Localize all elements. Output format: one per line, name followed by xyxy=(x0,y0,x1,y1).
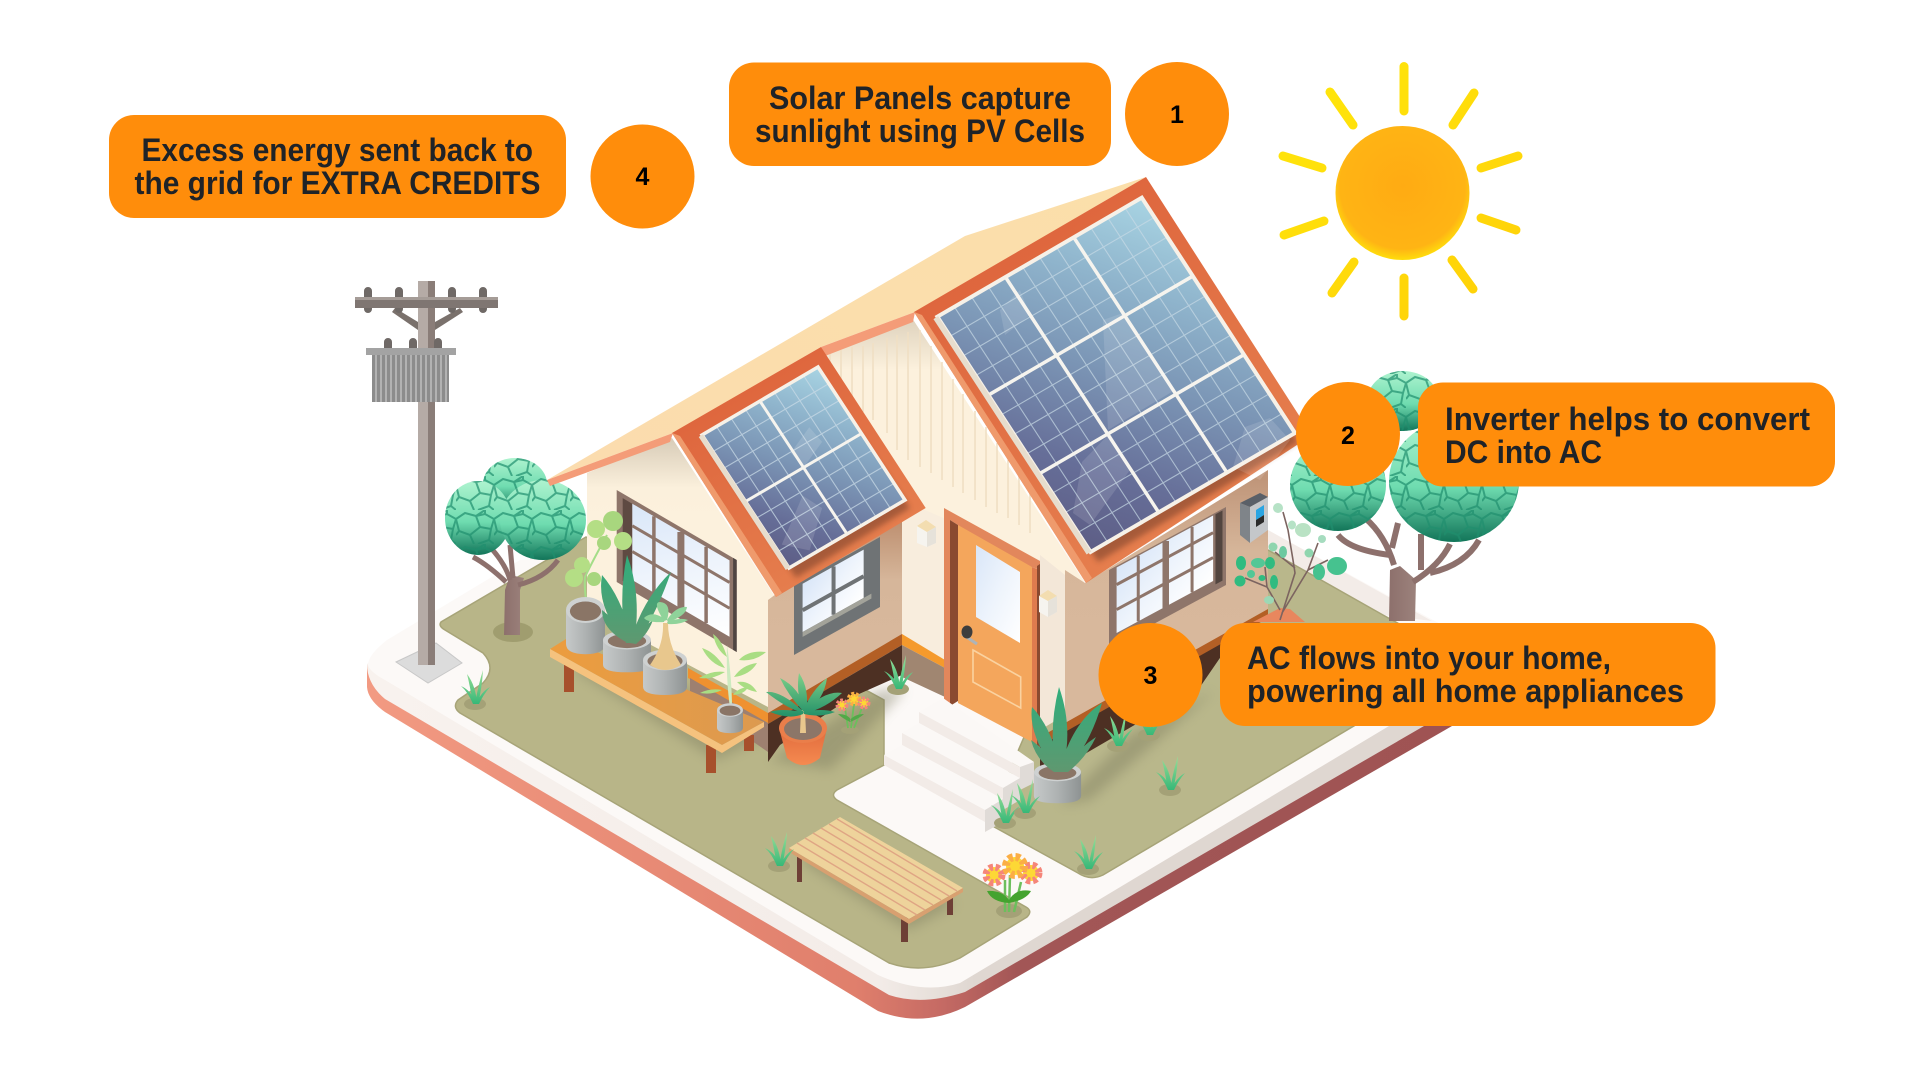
pot xyxy=(1034,763,1081,803)
riser two xyxy=(902,733,1003,799)
top landing xyxy=(919,698,1034,767)
riser three xyxy=(884,755,985,822)
door handle xyxy=(962,634,977,644)
door wall cream xyxy=(1040,555,1065,730)
right tan wall xyxy=(1065,470,1268,725)
centre wall xyxy=(902,500,1040,727)
callout 4: Excess energy sent back to xyxy=(142,132,533,168)
step number 4: 4 xyxy=(636,163,650,191)
pot four xyxy=(717,703,743,733)
callout 3: powering all home appliances xyxy=(1247,673,1684,709)
transformer xyxy=(372,355,449,402)
bulb plant xyxy=(650,623,681,670)
potted plants on table xyxy=(565,511,766,733)
small solar panel xyxy=(701,367,910,578)
pot two xyxy=(603,630,651,672)
ground shadows xyxy=(572,655,1215,930)
grass tufts xyxy=(461,655,1185,875)
callout 3: AC flows into your home, xyxy=(1247,640,1611,676)
gable siding xyxy=(824,318,1085,640)
transformer bushings xyxy=(388,342,438,350)
agave leaves xyxy=(1031,687,1102,772)
sun rays xyxy=(1283,66,1518,316)
braces xyxy=(392,308,463,330)
step number 3: 3 xyxy=(1144,662,1157,690)
small plant xyxy=(727,645,732,708)
lawn: right yard xyxy=(987,550,1465,878)
orange table xyxy=(550,639,764,773)
dormer frame xyxy=(672,347,926,597)
sun disc xyxy=(1336,126,1470,260)
step number 1 xyxy=(1125,62,1229,166)
eaves xyxy=(547,312,915,486)
callout 4 xyxy=(109,115,566,218)
wall lamp left xyxy=(917,520,936,547)
step number 2: 2 xyxy=(1341,422,1355,450)
door leaf xyxy=(958,522,1032,742)
callout 1: Solar Panels capture xyxy=(769,80,1071,116)
platform xyxy=(367,530,1490,1019)
panel reflections xyxy=(1000,290,1290,525)
step number 3 xyxy=(1098,623,1202,727)
step number 1: 1 xyxy=(1170,101,1184,129)
pot one xyxy=(566,597,605,654)
cream roof top xyxy=(547,177,1146,480)
callout 1: sunlight using PV Cells xyxy=(755,113,1085,149)
wall lamp right xyxy=(1039,590,1057,617)
tan wall baseboard and foundation xyxy=(768,634,902,724)
sun xyxy=(1283,66,1518,316)
tan wall xyxy=(768,500,902,714)
large solar panel xyxy=(936,198,1298,562)
big roof frame xyxy=(914,177,1300,583)
planter with shrub xyxy=(1234,503,1347,622)
tread two xyxy=(902,723,1020,788)
inverter xyxy=(1240,493,1268,543)
tread three xyxy=(884,745,1003,810)
window: tan wall xyxy=(794,537,880,655)
window: right wall xyxy=(1109,507,1226,648)
insulators xyxy=(368,291,483,309)
door glass xyxy=(976,545,1020,643)
callout 4: the grid for EXTRA CREDITS xyxy=(134,165,540,201)
bench xyxy=(789,817,963,942)
flowers small xyxy=(838,694,868,734)
roof xyxy=(547,177,1300,597)
riser one xyxy=(919,712,1020,778)
flowers large xyxy=(986,857,1039,918)
step number 4 xyxy=(590,124,694,228)
callout 3 xyxy=(1220,623,1716,726)
door panel xyxy=(973,650,1021,708)
utility pole xyxy=(355,281,498,683)
house walls xyxy=(547,177,1300,780)
left cream wall xyxy=(587,438,775,707)
terracotta potted palm xyxy=(766,673,842,765)
crossarm xyxy=(355,297,498,308)
tall leaves xyxy=(601,555,671,644)
callout 2: Inverter helps to convert xyxy=(1445,401,1810,437)
pole base xyxy=(396,643,462,683)
potted agave xyxy=(1031,687,1102,803)
step sides xyxy=(985,762,1034,832)
left tree xyxy=(445,458,586,642)
callout 1 xyxy=(729,62,1111,166)
lawn: left yard xyxy=(440,537,1030,968)
right tree xyxy=(1290,371,1519,621)
steps xyxy=(884,698,1034,832)
step number 2 xyxy=(1296,382,1400,486)
callout 2 xyxy=(1418,382,1835,486)
callout 2: DC into AC xyxy=(1445,434,1602,470)
window: left wall xyxy=(617,490,737,652)
left wall baseboard xyxy=(688,668,768,723)
door xyxy=(944,508,1040,747)
clover plant xyxy=(565,511,632,613)
door frame xyxy=(944,508,1040,706)
pot three xyxy=(643,650,687,695)
